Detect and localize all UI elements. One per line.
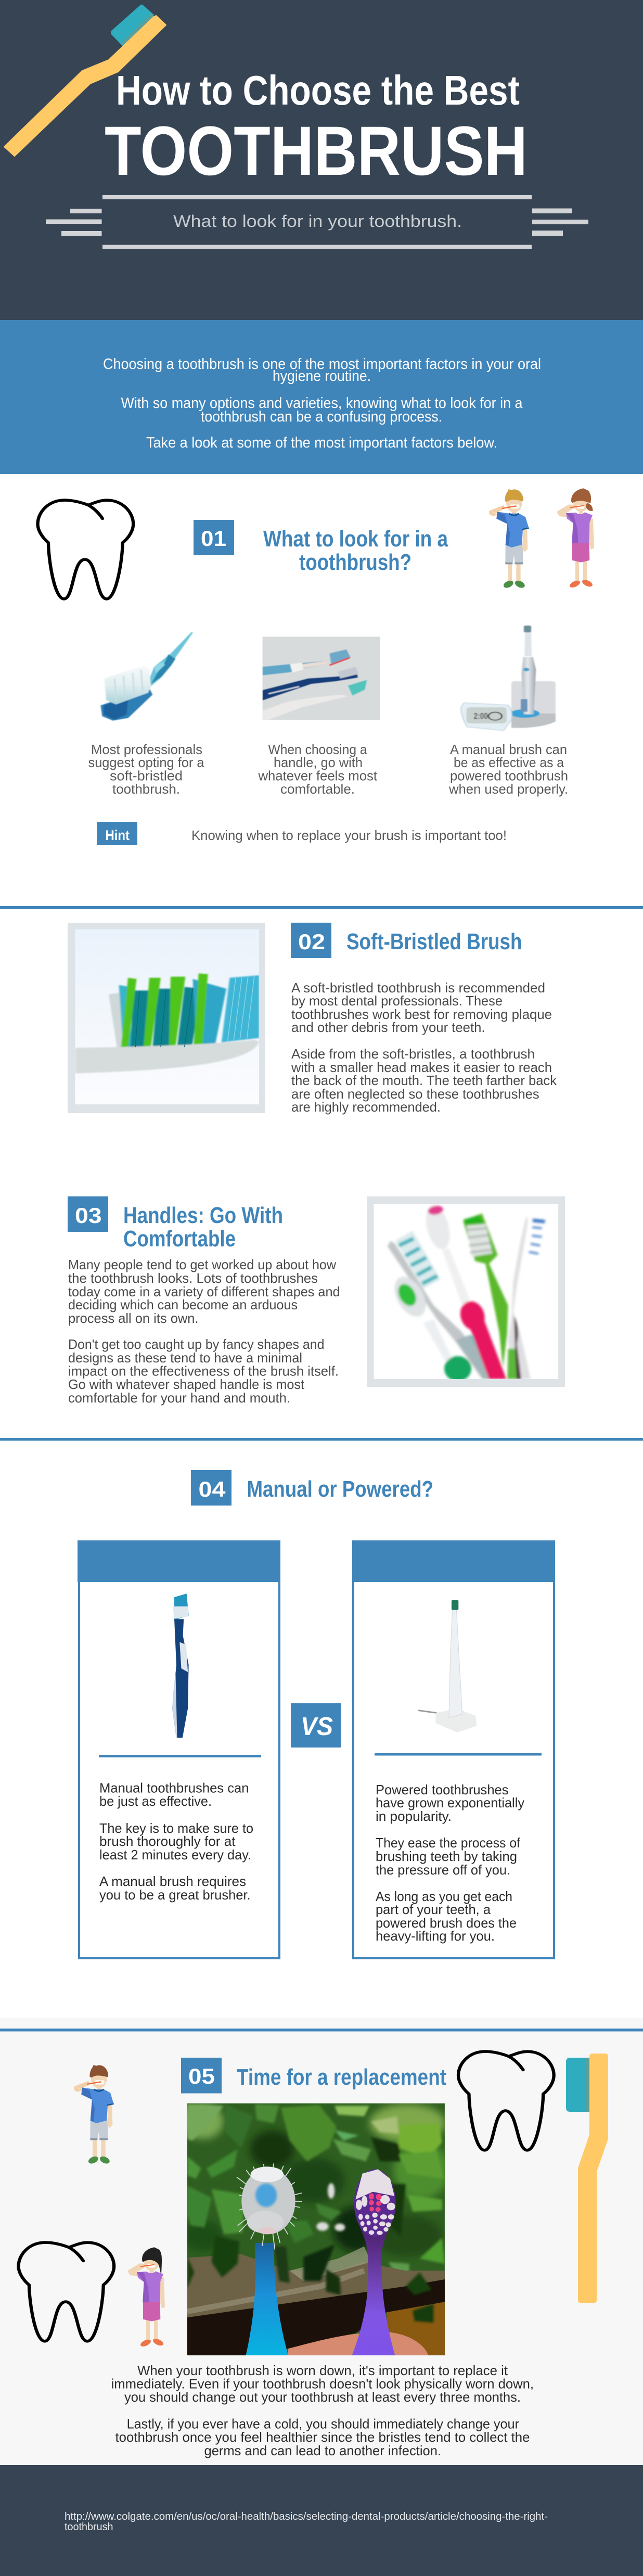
caption: soft-bristled: soft-bristled xyxy=(110,768,183,784)
text: replacement xyxy=(111,2363,534,2458)
text: handles: Don't get too caught up by fancy shapes and xyxy=(68,1336,325,1352)
photo: assorted colourful toothbrushes xyxy=(367,1196,565,1387)
number badge 03 xyxy=(68,1196,108,1232)
text: powered: They ease the process of xyxy=(376,1835,521,1851)
text: powered: As long as you get each xyxy=(376,1889,512,1904)
text: handles: today come in a variety of different shapes and xyxy=(68,1284,340,1299)
panel: header background xyxy=(0,0,643,320)
text: handles: comfortable for your hand and mouth. xyxy=(68,1390,290,1406)
VS badge: VS xyxy=(301,1713,333,1741)
icon: angled toothbrush xyxy=(4,5,166,156)
subtitle frame lines xyxy=(46,195,588,249)
photo: electric toothbrush with timer: 2:00 xyxy=(474,711,488,721)
intro text: toothbrush can be a confusing process. xyxy=(201,409,442,425)
illustration: boy brushing teeth xyxy=(489,489,529,589)
title: TOOTHBRUSH xyxy=(105,112,528,190)
caption: manual or powered: powered toothbrush xyxy=(450,768,568,784)
text: powered xyxy=(376,1782,524,1944)
heading 02: Soft-Bristled Brush xyxy=(346,929,522,954)
number badge 02 xyxy=(291,923,331,958)
text: handles: the toothbrush looks. Lots of toothbrushes xyxy=(68,1270,318,1286)
panel: powered toothbrush xyxy=(352,1540,555,1958)
title: How to Choose the Best xyxy=(116,67,520,113)
caption: soft-bristled: suggest opting for a xyxy=(88,755,204,770)
text: soft-bristled brush: and other debris from your teeth. xyxy=(291,1019,485,1035)
text: soft-bristled brush: with a smaller head makes it easier to reach xyxy=(291,1060,552,1075)
text: manual: Manual toothbrushes can xyxy=(99,1780,249,1795)
number badge 02: 02 xyxy=(298,929,325,954)
photo: electric toothbrush with timer xyxy=(461,626,556,731)
heading 01: toothbrush? xyxy=(299,550,411,575)
photo: three toothbrushes on cloth xyxy=(263,636,380,720)
caption: manual or powered: be as effective as a xyxy=(454,755,564,770)
text: powered: heavy-lifting for you. xyxy=(376,1928,495,1944)
text: soft-bristled brush: by most dental professionals. These xyxy=(291,993,503,1009)
text: manual: be just as effective. xyxy=(99,1793,212,1809)
text: replacement: immediately. Even if your toothbrush doesn't look physically worn down, xyxy=(111,2376,534,2392)
hint badge: Hint xyxy=(105,827,130,843)
source link xyxy=(65,2511,548,2533)
heading 01 xyxy=(263,526,448,575)
illustration: girl brushing teeth xyxy=(557,488,594,589)
panel: intro band xyxy=(0,320,643,474)
heading 01: What to look for in a xyxy=(263,526,448,552)
hint text: Knowing when to replace your brush is important too! xyxy=(191,827,507,843)
caption: handle: handle, go with xyxy=(274,755,363,770)
number badge 05 xyxy=(181,2058,222,2093)
hint badge xyxy=(97,822,137,845)
caption: manual or powered: when used properly. xyxy=(448,781,568,797)
photo: powered toothbrush xyxy=(418,1600,477,1732)
text: manual: brush thoroughly for at xyxy=(99,1833,236,1849)
text: manual: least 2 minutes every day. xyxy=(99,1847,251,1863)
number badge 04 xyxy=(191,1470,232,1506)
text: powered: powered brush does the xyxy=(376,1915,517,1931)
intro text xyxy=(103,356,541,451)
text: powered: the pressure off of you. xyxy=(376,1862,510,1878)
text: soft-bristled brush xyxy=(291,980,557,1115)
text: replacement: toothbrush once you feel healthier since the bristles tend to collect the xyxy=(115,2429,530,2445)
text: replacement: germs and can lead to another infection. xyxy=(204,2443,441,2458)
VS badge xyxy=(291,1703,341,1748)
caption: handle xyxy=(258,742,378,797)
caption: handle: When choosing a xyxy=(268,742,367,757)
text: soft-bristled brush: Aside from the soft-bristles, a toothbrush xyxy=(291,1046,535,1062)
text: powered: brushing teeth by taking xyxy=(376,1848,517,1864)
photo: worn and new toothbrushes xyxy=(182,2103,449,2355)
number badge 05: 05 xyxy=(188,2064,215,2088)
subtitle: What to look for in your toothbrush. xyxy=(173,212,462,231)
text: soft-bristled brush: toothbrushes work best for removing plaque xyxy=(291,1006,552,1022)
number badge 03: 03 xyxy=(75,1203,102,1228)
heading 03: Comfortable xyxy=(123,1226,236,1252)
photo: blue toothbrush xyxy=(100,632,193,721)
number badge 01 xyxy=(194,520,234,555)
title xyxy=(105,67,528,190)
number badge 04: 04 xyxy=(199,1477,226,1501)
caption: soft-bristled: Most professionals xyxy=(91,742,202,757)
heading 05: Time for a replacement xyxy=(237,2064,446,2090)
caption: manual or powered: A manual brush can xyxy=(450,742,567,757)
caption: soft-bristled xyxy=(88,742,204,797)
caption: handle: comfortable. xyxy=(280,781,355,797)
panel: section 5 background xyxy=(0,2018,643,2465)
intro text: hygiene routine. xyxy=(273,368,371,385)
illustration: girl with black hair xyxy=(127,2247,165,2348)
text: handles: impact on the effectiveness of the brush itself. xyxy=(68,1363,339,1379)
icon: tooth outline right xyxy=(458,2051,554,2150)
text: handles: process all on its own. xyxy=(68,1310,199,1326)
illustration: boy with brown hair xyxy=(74,2065,114,2165)
text: soft-bristled brush: are often neglected so these toothbrushes xyxy=(291,1086,539,1102)
text: powered: Powered toothbrushes xyxy=(376,1782,509,1797)
icon: tooth outline left xyxy=(19,2242,114,2341)
text: powered: part of your teeth, a xyxy=(376,1902,491,1917)
text: powered: in popularity. xyxy=(376,1808,452,1824)
intro text: Take a look at some of the most important factors below. xyxy=(146,435,497,451)
text: manual: you to be a great brusher. xyxy=(99,1887,251,1903)
text: manual: A manual brush requires xyxy=(99,1873,246,1889)
intro text: Choosing a toothbrush is one of the most important factors in your oral xyxy=(103,356,541,373)
caption: handle: whatever feels most xyxy=(258,768,378,784)
text: soft-bristled brush: are highly recommended. xyxy=(291,1099,441,1115)
text: handles: deciding which can become an arduous xyxy=(68,1297,298,1312)
number badge 01: 01 xyxy=(201,526,226,551)
intro text: With so many options and varieties, knowing what to look for in a xyxy=(121,395,523,412)
text: handles: Many people tend to get worked up about how xyxy=(68,1257,336,1272)
source link: http://www.colgate.com/en/us/oc/oral-health/basics/selecting-dental-products/article/choosing-the-right- xyxy=(65,2511,548,2522)
panel: footer xyxy=(0,2465,643,2576)
photo: manual toothbrush xyxy=(172,1593,189,1738)
panel: manual toothbrush xyxy=(78,1540,280,1958)
icon: tooth outline xyxy=(37,500,133,599)
text: replacement: When your toothbrush is worn down, it's important to replace it xyxy=(137,2363,508,2378)
source link: toothbrush xyxy=(65,2521,113,2533)
text: soft-bristled brush: A soft-bristled toothbrush is recommended xyxy=(291,980,545,996)
icon: upright toothbrush xyxy=(566,2054,608,2303)
text: handles: designs as these tend to have a minimal xyxy=(68,1350,302,1366)
caption: manual or powered xyxy=(448,742,568,797)
text: manual: The key is to make sure to xyxy=(99,1820,253,1836)
text: powered: have grown exponentially xyxy=(376,1795,524,1810)
text: handles: Go with whatever shaped handle is most xyxy=(68,1376,305,1392)
caption: soft-bristled: toothbrush. xyxy=(112,781,180,797)
text: handles xyxy=(68,1257,340,1406)
text: replacement: Lastly, if you ever have a cold, you should immediately change your xyxy=(127,2416,519,2432)
text: replacement: you should change out your toothbrush at least every three months. xyxy=(124,2389,521,2405)
text: manual xyxy=(99,1780,253,1903)
heading 03 xyxy=(123,1203,283,1252)
text: soft-bristled brush: the back of the mouth. The teeth farther back xyxy=(291,1073,557,1088)
photo: soft bristles close-up xyxy=(68,923,265,1113)
heading 04: Manual or Powered? xyxy=(247,1476,433,1502)
heading 03: Handles: Go With xyxy=(123,1203,283,1228)
